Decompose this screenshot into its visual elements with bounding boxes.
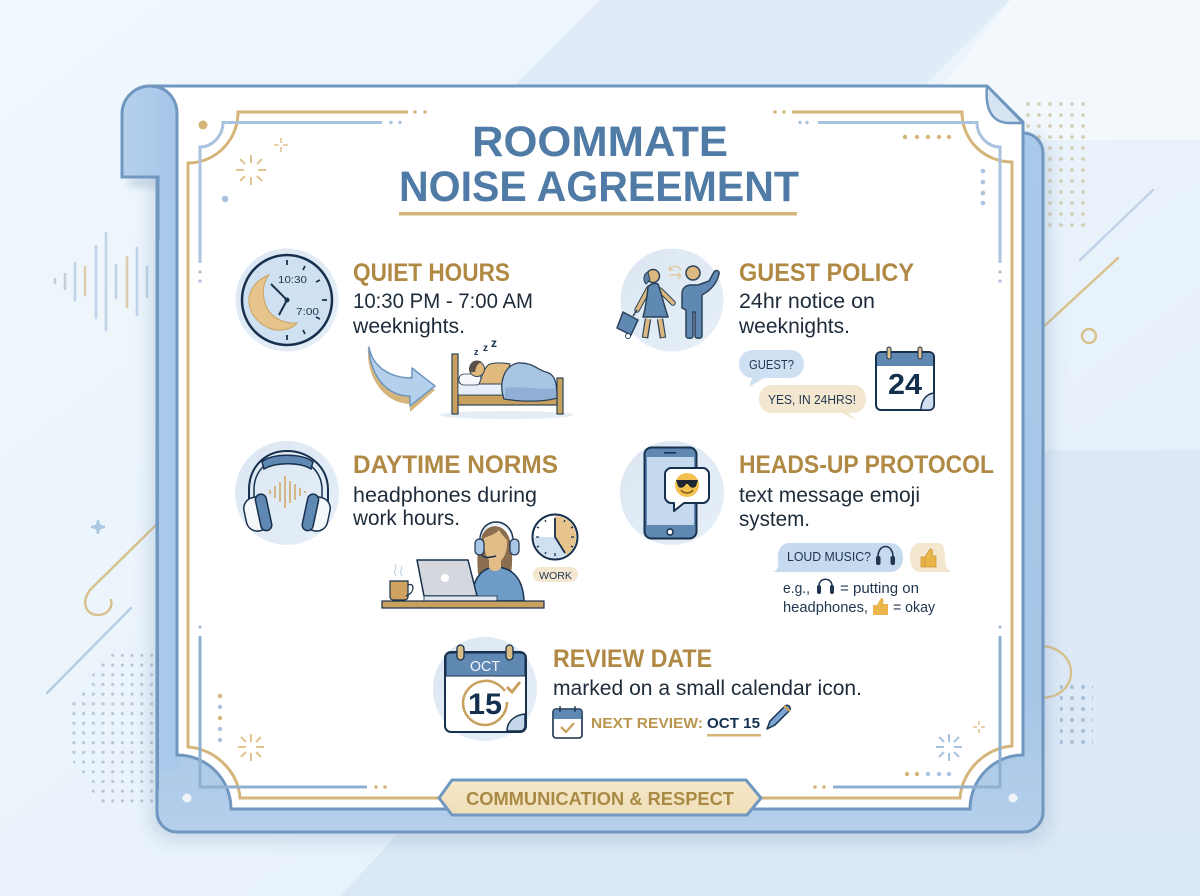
text: guest policy detail: 24hr notice on [739, 290, 875, 313]
blue inner border [200, 122, 1000, 787]
text: next review [591, 715, 761, 736]
title: NOISE AGREEMENT [399, 163, 799, 211]
ornaments [198, 110, 1002, 789]
text: daytime norms detail [352, 484, 537, 530]
panel: heads-up protocol [620, 441, 994, 616]
gold border [188, 112, 1012, 798]
icon: calendar 24 [876, 347, 934, 410]
speech bubble: guest answer [759, 385, 866, 421]
background: sound wave [55, 233, 147, 330]
icon: clock and moon [236, 248, 338, 352]
speech bubble: guest answer: YES, IN 24HRS! [768, 393, 856, 407]
icon: calendar oct 15: OCT [470, 659, 500, 675]
speech bubble: guest question [739, 350, 804, 387]
heading: guest policy: GUEST POLICY [739, 259, 914, 287]
icon: clock and moon: 10:30 [278, 274, 307, 286]
text: quiet hours detail: weeknights. [352, 315, 465, 338]
icon: work clock [532, 514, 578, 560]
icon: calendar 24: 24 [888, 369, 922, 401]
icon: calendar oct 15: 15 [468, 688, 502, 721]
text: daytime norms detail: work hours. [352, 507, 460, 530]
text: next review: OCT 15 [707, 715, 760, 732]
icon: person sleeping in bed [440, 336, 574, 419]
arrow: to bed [368, 347, 435, 412]
banner: communication and respect: COMMUNICATION & RESPECT [466, 788, 735, 809]
background: dot grid lower left [72, 650, 158, 805]
background: dot grid lower right [1060, 682, 1093, 748]
illustration: person working at laptop [382, 522, 544, 608]
text: guest policy detail: weeknights. [738, 315, 850, 338]
icon: person sleeping in bed: z [474, 347, 479, 357]
background: dot grid upper right [1025, 97, 1091, 229]
label: work: WORK [539, 570, 572, 582]
heading: review date: REVIEW DATE [553, 645, 712, 673]
icon: person sleeping in bed: z [483, 343, 488, 354]
icon: phone with emoji message [620, 441, 724, 545]
icon: small calendar [553, 706, 582, 738]
panel: quiet hours [236, 248, 574, 419]
speech bubble: loud music [773, 543, 903, 572]
panel: review date [433, 637, 862, 741]
text: quiet hours detail [352, 290, 533, 338]
panel: daytime norms [235, 441, 578, 608]
heading: heads-up protocol: HEADS-UP PROTOCOL [739, 451, 994, 479]
icon: calendar oct 15 [433, 637, 537, 741]
text: quiet hours detail: 10:30 PM - 7:00 AM [353, 290, 533, 313]
paper sheet [150, 86, 1023, 809]
text: emoji legend: = okay [893, 600, 936, 616]
text: daytime norms detail: headphones during [353, 484, 537, 507]
text: emoji legend: = putting on [840, 581, 919, 597]
text: heads-up detail: text message emoji [739, 484, 920, 507]
speech bubble: guest question: GUEST? [749, 358, 794, 372]
label: work [533, 567, 578, 582]
frame rivets [182, 794, 1018, 802]
text: guest policy detail [738, 290, 875, 338]
text: review date detail: marked on a small calendar icon. [553, 677, 862, 700]
scroll frame [122, 86, 1049, 840]
text: emoji legend: e.g., [783, 581, 810, 597]
speech bubble: loud music: LOUD MUSIC? [787, 550, 871, 564]
text: heads-up detail [739, 484, 920, 531]
text: next review: NEXT REVIEW: [591, 715, 703, 732]
banner: communication and respect [439, 780, 761, 815]
text: emoji legend [783, 579, 936, 616]
text: heads-up detail: system. [739, 508, 810, 531]
title underline [399, 212, 797, 216]
panel: guest policy [617, 248, 934, 421]
icon: person sleeping in bed: z [491, 336, 497, 350]
icon: headphones [235, 441, 339, 545]
heading: quiet hours: QUIET HOURS [353, 259, 510, 287]
icon: guest and host [617, 248, 724, 352]
background: line accents [47, 190, 1153, 698]
title [399, 118, 799, 211]
title: ROOMMATE [472, 118, 728, 166]
text: emoji legend: headphones, [783, 600, 868, 616]
icon: clock and moon: 7:00 [296, 306, 319, 318]
heading: daytime norms: DAYTIME NORMS [353, 451, 558, 479]
icon: pen [767, 705, 790, 729]
speech bubble: thumbs up [910, 543, 951, 572]
